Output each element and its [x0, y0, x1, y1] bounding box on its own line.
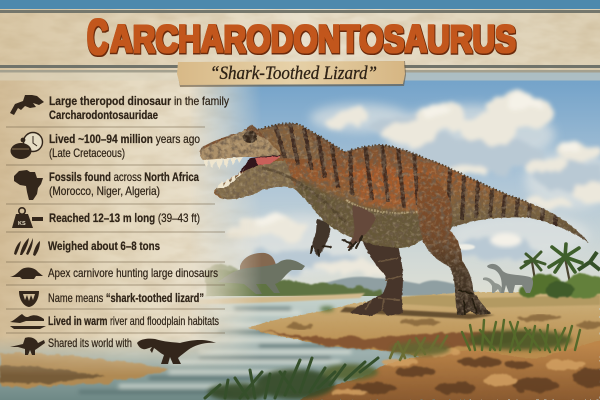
title: C — [87, 9, 108, 65]
icon: map of Africa — [14, 170, 43, 200]
lower-left bank — [0, 354, 168, 387]
near arm with claws — [347, 205, 376, 248]
row 7 text: Name means “shark-toothed lizard” — [48, 291, 204, 305]
soft cloud haze — [230, 104, 600, 275]
clouds — [225, 92, 600, 277]
palms and bushes — [519, 244, 600, 298]
icon: clock and fossil — [10, 132, 42, 159]
icon: weight and ruler: KS — [18, 221, 26, 227]
belly shading — [294, 178, 452, 248]
icon: weight and ruler — [12, 208, 43, 228]
right sandy ground — [248, 292, 600, 380]
icon: dinosaur skull — [10, 95, 44, 115]
foreground rocks — [300, 340, 600, 400]
row 3 text: Fossils found across North Africa — [49, 170, 199, 184]
icon: river landscape — [10, 314, 46, 329]
icon: theropod silhouette — [137, 339, 216, 364]
row dividers — [6, 127, 225, 333]
dark stripes — [275, 124, 556, 226]
row 1 text: Large theropod dinosaur in the family — [49, 94, 229, 108]
background sauropods — [483, 264, 533, 293]
subtitle plaque — [177, 61, 406, 87]
subtitle plaque: “Shark-Toothed Lizard” — [210, 63, 377, 84]
head shading — [200, 130, 280, 162]
row 2 second line: (Late Cretaceous) — [49, 146, 125, 160]
row 6 text: Apex carnivore hunting large dinosaurs — [48, 266, 218, 280]
main dinosaur: carcharodontosaurus — [195, 120, 595, 320]
icon: armoured dinosaur prey — [10, 268, 43, 279]
smaller spinosaur in the distance — [205, 253, 305, 296]
icon: toothed jaw — [19, 291, 39, 307]
icon: claws — [14, 238, 40, 256]
row 3 second line: (Morocco, Niger, Algeria) — [49, 184, 160, 198]
row 1 second line: Carcharodontosauridae — [49, 108, 158, 122]
row 9 text: Shared its world with — [48, 336, 132, 350]
grass plants — [205, 306, 580, 400]
teeth — [204, 157, 243, 170]
mouth interior — [238, 155, 282, 174]
title banner — [0, 9, 600, 80]
water — [0, 296, 470, 400]
info panel background — [0, 72, 258, 372]
distant hills — [300, 277, 478, 296]
orange flank — [352, 165, 429, 212]
row 2 text: Lived ~100–94 million years ago — [49, 132, 200, 146]
far shore sand — [195, 293, 365, 304]
title — [87, 9, 516, 65]
skin mottling — [195, 120, 595, 250]
dorsal spines — [258, 123, 527, 202]
row 8 text: Lived in warm river and floodplain habitats — [48, 314, 219, 328]
near thigh and leg — [416, 172, 491, 316]
pale flank frill — [346, 200, 422, 213]
left foot and leg of carcharodontosaurus — [350, 240, 403, 316]
top blue strip shading — [0, 0, 600, 9]
row 5 text: Weighed about 6–8 tons — [48, 239, 160, 253]
icon: spinosaurus silhouette — [10, 337, 45, 355]
title: ARCHARODONTOSAURUS — [110, 18, 516, 61]
row 4 text: Reached 12–13 m long (39–43 ft) — [49, 211, 200, 225]
